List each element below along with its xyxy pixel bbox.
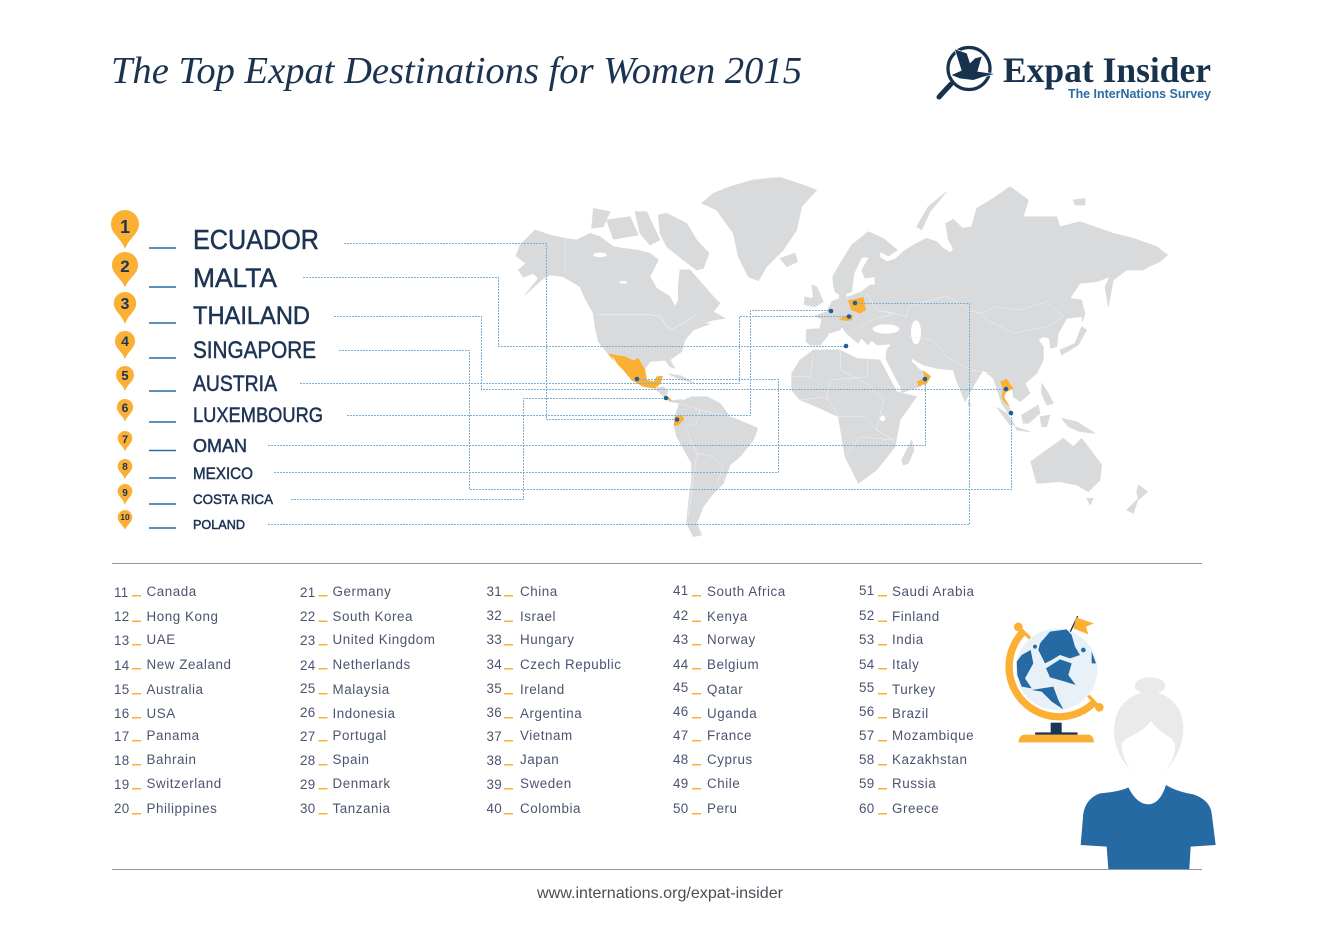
column 51-60: Turkey xyxy=(892,682,936,697)
column 31-40: 35 xyxy=(486,681,502,696)
column 51-60: 51 xyxy=(859,583,874,598)
rank 6 Luxembourg xyxy=(117,399,323,427)
column 51-60: 55 xyxy=(859,680,874,695)
rank 1 Ecuador: ECUADOR xyxy=(193,224,319,255)
rank 7 Oman: 7 xyxy=(122,434,128,446)
column 31-40: China xyxy=(520,584,558,599)
column 21-30: Spain xyxy=(332,752,370,767)
icon: globe on stand xyxy=(1009,616,1104,742)
column 41-50: Cyprus xyxy=(707,752,753,767)
column 31-40: 38 xyxy=(486,753,502,768)
rank 10 Poland: POLAND xyxy=(193,517,245,532)
column 11-20: New Zealand xyxy=(146,657,231,672)
column 11-20: 12 xyxy=(114,609,130,624)
column 11-20: 13 xyxy=(114,633,130,648)
column 51-60: India xyxy=(892,632,924,647)
ranking list 11-60 xyxy=(114,583,975,816)
column 51-60: 59 xyxy=(859,776,874,791)
map: Costa Rica highlighted xyxy=(667,397,672,401)
rank 8 Mexico: MEXICO xyxy=(193,464,253,483)
map: Ecuador highlighted xyxy=(674,415,684,426)
rank 5 Austria xyxy=(116,366,277,396)
column 31-40: Japan xyxy=(520,752,559,767)
column 51-60: 52 xyxy=(859,608,874,623)
column 31-40: Colombia xyxy=(520,801,581,816)
column 11-20: 16 xyxy=(114,706,130,721)
column 41-50: 42 xyxy=(673,608,688,623)
column 31-40: Hungary xyxy=(520,632,574,647)
column 11-20 xyxy=(114,584,231,816)
map: Americas and Greenland xyxy=(516,177,817,537)
column 11-20: Bahrain xyxy=(146,752,197,767)
rank 10 Poland: 10 xyxy=(120,512,130,522)
column 11-20: Switzerland xyxy=(146,776,222,791)
column 21-30: South Korea xyxy=(332,609,413,624)
column 41-50: Qatar xyxy=(707,682,743,697)
column 41-50 xyxy=(673,583,786,816)
column 51-60: 53 xyxy=(859,632,874,647)
title: The Top Expat Destinations for Women 2015 xyxy=(111,50,802,92)
column 31-40: 39 xyxy=(486,777,502,792)
rank 9 Costa Rica: 9 xyxy=(122,488,128,499)
column 21-30: 26 xyxy=(300,705,316,720)
rank 7 Oman xyxy=(118,431,247,456)
column 41-50: 43 xyxy=(673,632,688,647)
column 51-60: Greece xyxy=(892,801,939,816)
column 41-50: 47 xyxy=(673,728,688,743)
column 41-50: 49 xyxy=(673,776,688,791)
column 11-20: 20 xyxy=(114,801,130,816)
column 21-30: Netherlands xyxy=(332,657,411,672)
column 41-50: Chile xyxy=(707,776,740,791)
column 31-40: 37 xyxy=(486,729,502,744)
column 21-30: 24 xyxy=(300,658,316,673)
rank 6 Luxembourg: 6 xyxy=(122,401,129,415)
map: Oman highlighted xyxy=(917,371,931,386)
column 51-60: Saudi Arabia xyxy=(892,584,975,599)
rank 4 Singapore: SINGAPORE xyxy=(193,337,316,364)
rank 9 Costa Rica xyxy=(118,484,274,507)
column 51-60: 60 xyxy=(859,801,874,816)
column 21-30: Tanzania xyxy=(332,801,391,816)
column 41-50: Uganda xyxy=(707,706,757,721)
rank 2 Malta: MALTA xyxy=(193,263,277,293)
logo tagline: The InterNations Survey xyxy=(1068,87,1211,101)
column 11-20: 11 xyxy=(114,585,128,600)
column 41-50: Kenya xyxy=(707,609,748,624)
column 51-60: Italy xyxy=(892,657,919,672)
column 41-50: South Africa xyxy=(707,584,786,599)
column 31-40: Argentina xyxy=(520,706,582,721)
column 21-30: Denmark xyxy=(332,776,391,791)
column 21-30: 30 xyxy=(300,801,316,816)
column 31-40: 32 xyxy=(486,608,502,623)
rank 4 Singapore: 4 xyxy=(121,333,129,349)
column 31-40: 31 xyxy=(486,584,502,599)
column 11-20: 14 xyxy=(114,658,130,673)
column 31-40: Israel xyxy=(520,609,556,624)
map location dots xyxy=(635,301,1013,422)
column 21-30: 27 xyxy=(300,729,316,744)
column 51-60: 57 xyxy=(859,728,874,743)
rank 3 Thailand: THAILAND xyxy=(193,302,310,330)
rank 8 Mexico: 8 xyxy=(122,462,128,473)
connector lines xyxy=(268,244,1012,524)
column 11-20: Philippines xyxy=(146,801,217,816)
column 31-40 xyxy=(486,584,621,816)
column 21-30: 29 xyxy=(300,777,316,792)
woman hair xyxy=(1114,677,1183,772)
column 51-60: Kazakhstan xyxy=(892,752,967,767)
rank 2 Malta: 2 xyxy=(120,257,130,276)
rank 3 Thailand xyxy=(114,292,310,330)
column 11-20: 19 xyxy=(114,777,130,792)
column 31-40: Sweden xyxy=(520,776,572,791)
column 21-30: 21 xyxy=(300,585,316,600)
column 51-60 xyxy=(859,583,975,816)
column 11-20: Hong Kong xyxy=(146,609,218,624)
column 11-20: USA xyxy=(146,706,176,721)
footer url: www.internations.org/expat-insider xyxy=(536,885,784,902)
map: Eurasia, Africa and Oceania xyxy=(792,187,1168,513)
map: Thailand highlighted xyxy=(1001,379,1013,406)
rank 1 Ecuador xyxy=(111,210,319,255)
column 51-60: Mozambique xyxy=(892,728,974,743)
divider top xyxy=(112,562,1202,564)
column 21-30: 22 xyxy=(300,609,316,624)
column 21-30: Portugal xyxy=(332,728,387,743)
column 31-40: 36 xyxy=(486,705,502,720)
logo wordmark: Expat Insider xyxy=(1003,50,1211,90)
column 11-20: Australia xyxy=(146,682,204,697)
column 21-30: 23 xyxy=(300,633,316,648)
column 51-60: Russia xyxy=(892,776,936,791)
divider bottom xyxy=(112,868,1202,870)
top ten ranking xyxy=(111,210,323,532)
icon: magnifying glass with bird xyxy=(939,48,994,97)
icon: woman figure xyxy=(1081,677,1216,869)
column 21-30: Malaysia xyxy=(332,682,390,697)
column 41-50: 41 xyxy=(673,583,688,598)
rank 9 Costa Rica: COSTA RICA xyxy=(193,491,274,507)
column 11-20: 18 xyxy=(114,753,130,768)
column 21-30 xyxy=(300,584,435,816)
column 31-40: 34 xyxy=(486,657,502,672)
rank 6 Luxembourg: LUXEMBOURG xyxy=(193,404,323,427)
column 31-40: Vietnam xyxy=(520,728,573,743)
column 31-40: Ireland xyxy=(520,682,565,697)
map: Austria highlighted xyxy=(839,315,853,321)
column 11-20: 17 xyxy=(114,729,130,744)
column 21-30: Indonesia xyxy=(332,706,396,721)
column 11-20: Canada xyxy=(146,584,197,599)
woman shirt xyxy=(1081,785,1216,869)
column 51-60: 58 xyxy=(859,752,874,767)
column 41-50: 44 xyxy=(673,657,689,672)
world map xyxy=(516,177,1168,537)
rank 5 Austria: AUSTRIA xyxy=(193,371,277,396)
rank 7 Oman: OMAN xyxy=(193,436,247,456)
rank 1 Ecuador: 1 xyxy=(120,217,130,237)
column 31-40: Czech Republic xyxy=(520,657,621,672)
column 11-20: UAE xyxy=(146,632,176,647)
map: Mexico highlighted xyxy=(608,354,663,388)
column 21-30: United Kingdom xyxy=(332,632,435,647)
logo: Expat Insider xyxy=(939,48,1211,101)
column 21-30: 25 xyxy=(300,681,316,696)
column 41-50: Norway xyxy=(707,632,756,647)
column 11-20: 15 xyxy=(114,682,130,697)
column 41-50: 50 xyxy=(673,801,688,816)
column 51-60: 56 xyxy=(859,704,874,719)
rank 4 Singapore xyxy=(115,331,316,364)
column 11-20: Panama xyxy=(146,728,200,743)
map: Poland highlighted xyxy=(848,297,866,313)
rank 3 Thailand: 3 xyxy=(121,296,130,313)
column 41-50: France xyxy=(707,728,752,743)
column 51-60: Finland xyxy=(892,609,940,624)
column 41-50: 46 xyxy=(673,704,688,719)
column 31-40: 40 xyxy=(486,801,502,816)
column 41-50: Peru xyxy=(707,801,738,816)
column 21-30: Germany xyxy=(332,584,391,599)
rank 5 Austria: 5 xyxy=(121,368,129,383)
column 31-40: 33 xyxy=(486,632,502,647)
rank 8 Mexico xyxy=(118,459,253,483)
column 51-60: 54 xyxy=(859,657,875,672)
column 21-30: 28 xyxy=(300,753,316,768)
column 41-50: 45 xyxy=(673,680,688,695)
rank 2 Malta xyxy=(112,252,277,293)
rank 10 Poland xyxy=(118,510,245,532)
column 51-60: Brazil xyxy=(892,706,929,721)
column 41-50: 48 xyxy=(673,752,688,767)
column 41-50: Belgium xyxy=(707,657,759,672)
